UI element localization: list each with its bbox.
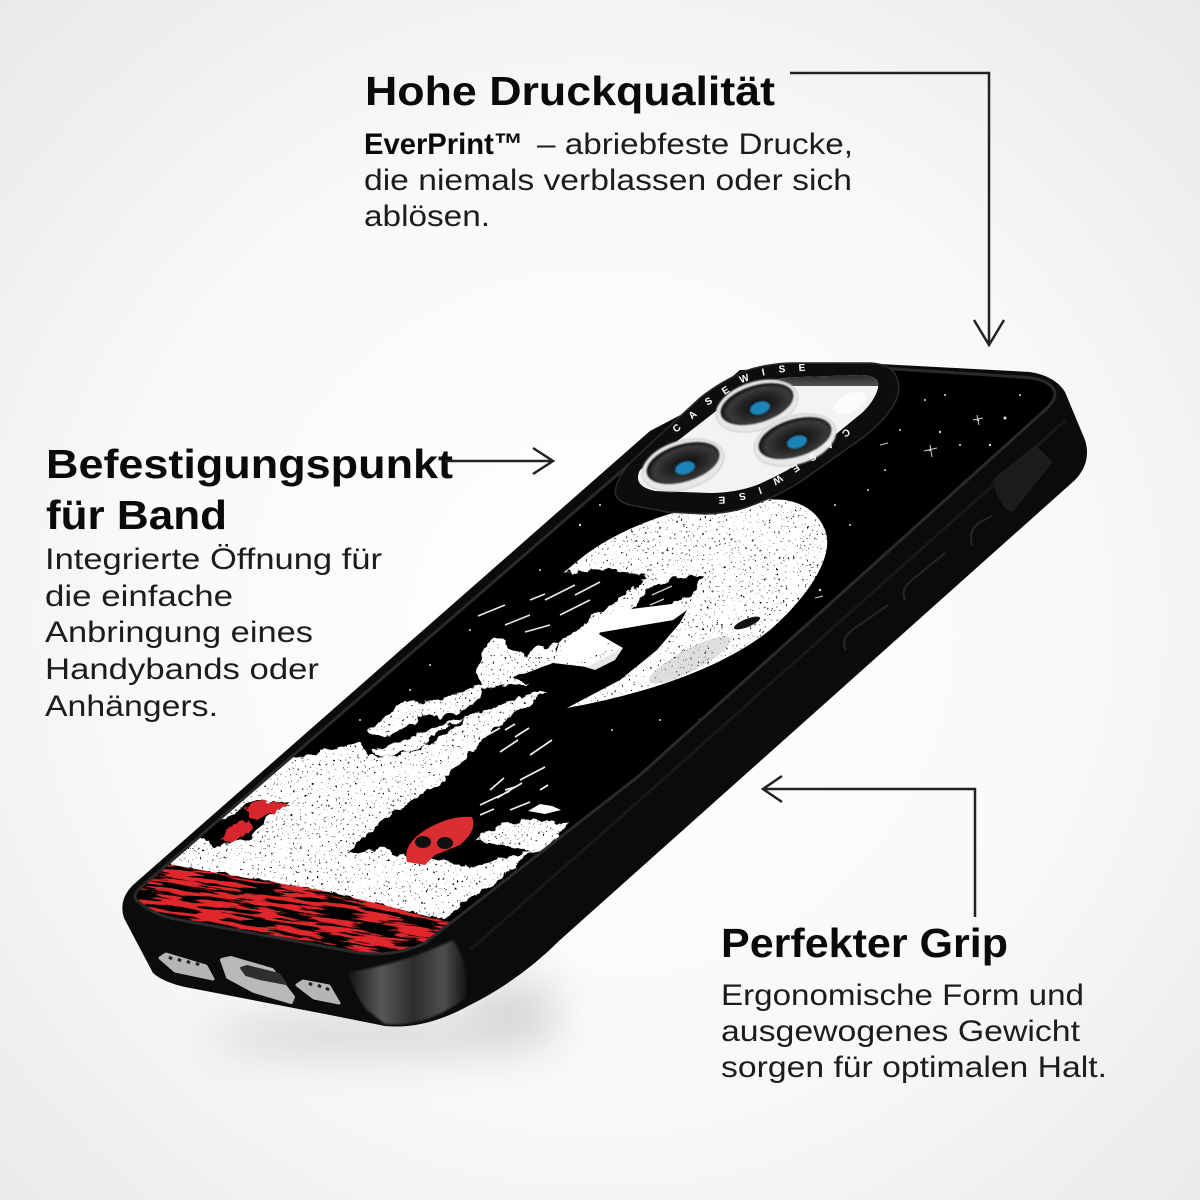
body: grip	[721, 979, 1107, 1084]
red skull	[406, 817, 474, 865]
lens 3	[636, 430, 730, 500]
red blotch upper	[245, 800, 288, 818]
red blotch lower	[220, 820, 250, 842]
speaker left	[160, 954, 213, 979]
phone case illustration	[122, 362, 1088, 1026]
arrow: print quality	[790, 73, 1004, 345]
dark patch with red figure	[200, 800, 290, 848]
white dress and clouds	[160, 638, 570, 920]
heading: strap attachment: für Band	[46, 492, 227, 538]
heading: grip: Perfekter Grip	[721, 920, 1008, 966]
heading: strap attachment: Befestigungspunkt	[46, 441, 453, 487]
body: print quality	[364, 128, 853, 233]
brand text bottom: CASEWISE	[718, 429, 850, 504]
texture specks	[174, 500, 827, 918]
speaker right	[297, 981, 339, 1003]
figure arm	[553, 603, 687, 670]
red water band	[138, 865, 450, 952]
body: strap attachment: Integrierte Öffnung für	[45, 543, 382, 576]
body: print quality: ablösen.	[364, 200, 490, 233]
charging opening	[241, 966, 286, 984]
black art background	[170, 370, 1054, 922]
heading: print quality: Hohe Druckqualität	[365, 68, 775, 114]
shadow under arm	[513, 610, 687, 708]
stars	[359, 394, 1031, 731]
charging port	[222, 958, 293, 1002]
volume down button	[844, 605, 888, 650]
moon	[530, 499, 827, 708]
brand text top: CASEWISE	[673, 364, 806, 432]
figure hair right	[630, 575, 705, 613]
camera bump	[614, 362, 900, 515]
camera plate	[638, 375, 878, 493]
volume up button	[904, 553, 945, 600]
body: strap attachment: Handybands oder	[45, 653, 319, 686]
arrow: grip	[763, 776, 975, 917]
body: strap attachment: Anhängers.	[45, 690, 218, 723]
body: grip: ausgewogenes Gewicht	[721, 1015, 1081, 1048]
white blob on dress	[528, 804, 561, 814]
moon crater	[734, 616, 760, 630]
mute pad	[995, 448, 1050, 510]
body: strap attachment	[45, 543, 382, 723]
plate shadow	[738, 375, 878, 396]
flash	[830, 387, 870, 419]
figure hair left	[530, 568, 647, 642]
glossy bottom corner	[348, 940, 467, 1024]
artwork face	[136, 370, 1054, 952]
callout: print quality	[364, 68, 853, 233]
body: print quality: – abriebfeste Drucke,	[537, 128, 853, 161]
callout: strap attachment	[45, 441, 453, 723]
body: strap attachment: die einfache	[45, 580, 233, 613]
body: grip: Ergonomische Form und	[721, 979, 1084, 1012]
hair right highlights	[650, 586, 672, 605]
body: strap attachment: Anbringung eines	[45, 616, 313, 649]
phone drop shadow	[210, 980, 560, 1055]
body: grip: sorgen für optimalen Halt.	[721, 1051, 1107, 1084]
dress texture	[480, 724, 552, 815]
side ridge	[470, 420, 1066, 950]
art rim	[135, 368, 1055, 954]
arrow: strap attachment	[445, 448, 553, 474]
heading: strap attachment	[46, 441, 453, 538]
lens 2	[748, 405, 842, 475]
callout: grip	[721, 920, 1107, 1084]
case body	[122, 364, 1087, 1027]
lens 1	[710, 371, 804, 441]
shaded moon texture	[649, 636, 731, 684]
action button	[971, 516, 992, 545]
body: print quality: EverPrint™	[364, 128, 523, 161]
body: print quality: die niemals verblassen oder sich	[364, 164, 852, 197]
hair highlights	[478, 582, 600, 632]
camera ring	[615, 363, 899, 514]
